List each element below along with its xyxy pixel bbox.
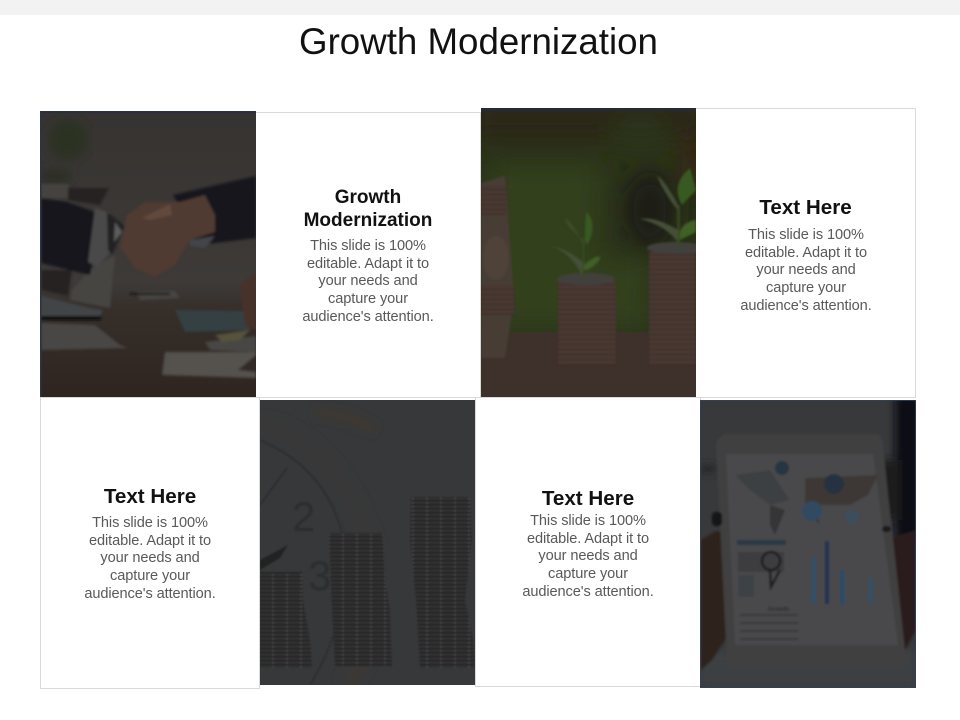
photo: clock and coin stacks: 3 <box>308 552 331 599</box>
text block: bottom left: your needs and <box>100 550 200 566</box>
text block: bottom middle: capture your <box>548 566 628 582</box>
heading: growth modernization: Growth <box>335 187 401 208</box>
text block: bottom middle: audience's attention. <box>522 584 654 600</box>
text block: growth modernization: your needs and <box>318 273 418 289</box>
photo: tablet showing global share dashboard <box>700 400 916 688</box>
heading: text here top right: Text Here <box>759 196 852 219</box>
text block: growth modernization: This slide is 100% <box>310 238 426 254</box>
photo: tablet showing global share dashboard: Growth. <box>768 607 791 613</box>
text block: bottom middle: editable. Adapt it to <box>527 531 649 547</box>
photo: clock and coin stacks <box>260 400 475 685</box>
text block: top right <box>740 227 872 314</box>
text block: top right: your needs and <box>756 262 856 278</box>
text block: bottom left: capture your <box>110 568 190 584</box>
text block: bottom left: audience's attention. <box>84 586 216 602</box>
text block: growth modernization: audience's attention. <box>302 309 434 325</box>
panel: bottom left text card <box>40 397 260 689</box>
text block: bottom middle: your needs and <box>538 548 638 564</box>
title: Growth Modernization <box>299 21 658 62</box>
photo: clock and coin stacks: 2 <box>292 493 315 540</box>
panel: top right text card <box>695 108 916 398</box>
panel: growth modernization text card <box>255 112 481 398</box>
text block: bottom middle <box>522 513 654 600</box>
photo: seedlings growing on coin stacks <box>481 108 696 397</box>
text block: bottom middle: This slide is 100% <box>530 513 646 529</box>
text block: top right: capture your <box>766 280 846 296</box>
text block: top right: This slide is 100% <box>748 227 864 243</box>
text block: growth modernization <box>302 238 434 325</box>
text block: top right: audience's attention. <box>740 298 872 314</box>
heading: growth modernization <box>304 187 432 231</box>
text block: bottom left: editable. Adapt it to <box>89 533 211 549</box>
text block: bottom left <box>84 515 216 602</box>
text block: top right: editable. Adapt it to <box>745 245 867 261</box>
text block: growth modernization: capture your <box>328 291 408 307</box>
panel: bottom middle text card <box>475 397 701 687</box>
heading: text here bottom middle: Text Here <box>542 487 634 510</box>
heading: text here bottom left: Text Here <box>104 485 196 508</box>
text block: growth modernization: editable. Adapt it to <box>307 256 429 272</box>
heading: growth modernization: Modernization <box>304 210 432 231</box>
top grey band <box>0 0 960 15</box>
text block: bottom left: This slide is 100% <box>92 515 208 531</box>
photo: handshake over desk <box>40 111 256 397</box>
